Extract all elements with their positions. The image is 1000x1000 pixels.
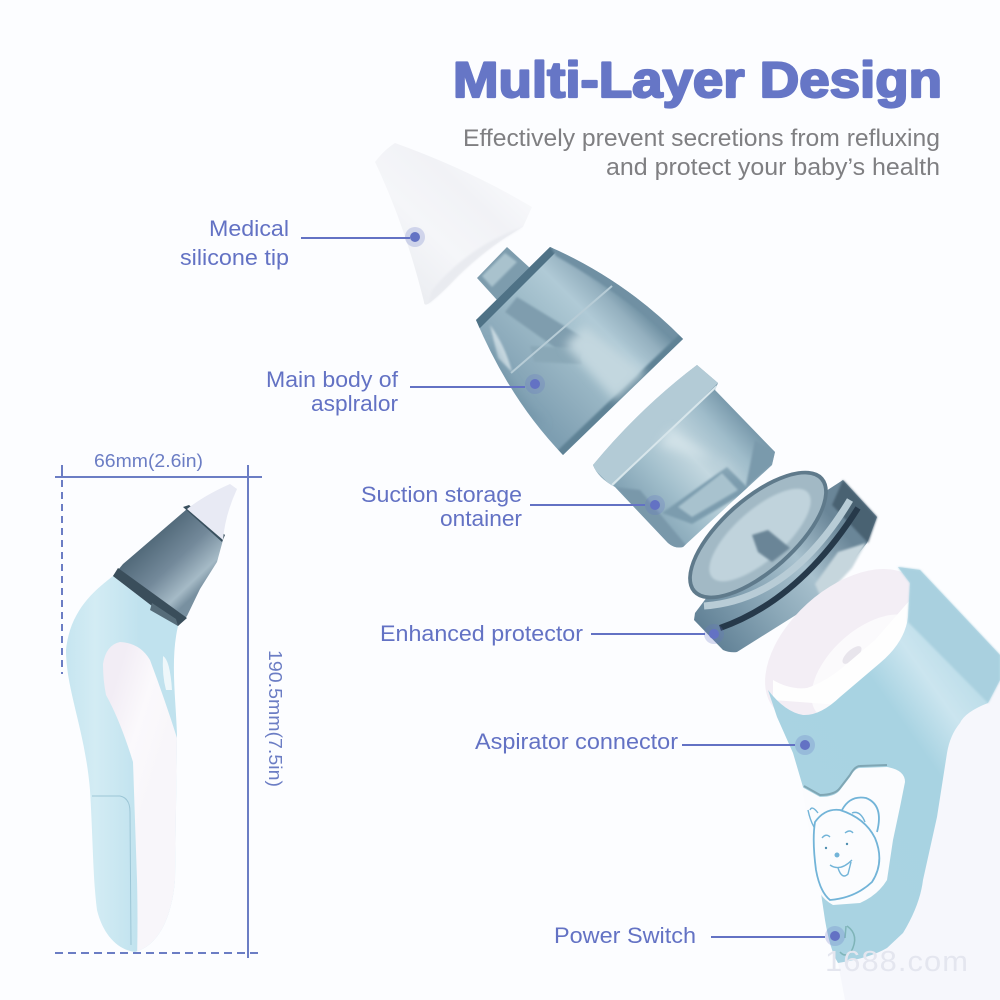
callout: suction storage container: Suction storage	[361, 482, 522, 507]
dimension: width: 66mm(2.6in)	[94, 451, 203, 471]
side view grip	[103, 642, 178, 960]
callout: enhanced protector	[380, 621, 724, 646]
callout: main body of aspirator: asplralor	[311, 391, 398, 416]
subtitle: Effectively prevent secretions from refluxing	[463, 125, 940, 152]
side view collar teeth	[150, 603, 178, 626]
side view handle	[66, 576, 178, 952]
product: aspirator body and connector	[737, 540, 1000, 1000]
callout: aspirator connector: Aspirator connector	[475, 729, 678, 754]
side view battery cover	[92, 796, 131, 945]
callout: power switch: Power Switch	[554, 923, 696, 948]
callout: aspirator connector	[475, 729, 815, 755]
title: Multi-Layer Design	[453, 52, 942, 108]
callout: main body of aspirator	[266, 367, 545, 416]
white ring	[737, 540, 953, 750]
product: suction storage container	[590, 362, 775, 550]
side view dark section	[113, 509, 223, 626]
callout: main body of aspirator: Main body of	[266, 367, 399, 392]
callout: power switch	[554, 923, 845, 948]
product: silicone tip	[375, 143, 532, 305]
dimension: height: 190.5mm(7.5in)	[265, 650, 285, 787]
callout: suction storage container: ontainer	[440, 506, 522, 531]
body white shell	[838, 670, 1000, 1000]
watermark: 1688.com	[825, 946, 969, 978]
product: side view aspirator	[66, 484, 237, 960]
subtitle	[463, 125, 940, 181]
callout: medical silicone tip	[180, 216, 425, 270]
side view nose tip	[187, 484, 237, 540]
icon: bear button	[802, 765, 905, 905]
icon: power symbol	[840, 926, 855, 955]
blue connector	[768, 567, 1000, 963]
callout: medical silicone tip: Medical	[209, 216, 289, 241]
product: main body of aspirator	[470, 243, 690, 460]
callout: enhanced protector: Enhanced protector	[380, 621, 583, 646]
callout: medical silicone tip: silicone tip	[180, 245, 289, 270]
product: enhanced protector	[668, 449, 877, 652]
callout: suction storage container	[361, 482, 665, 531]
subtitle: and protect your baby’s health	[606, 154, 940, 181]
